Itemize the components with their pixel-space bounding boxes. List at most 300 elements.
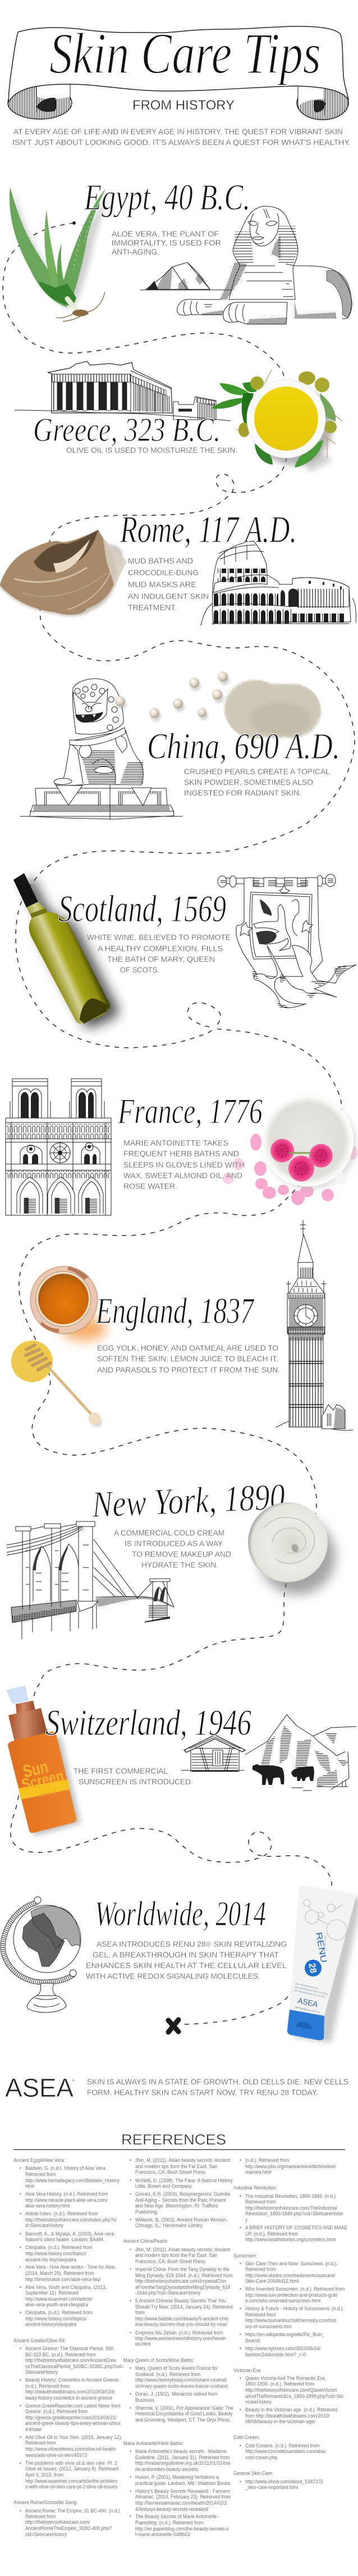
references: Ancient Egypt: http://www.history.com/topics/ <box>25 2251 87 2256</box>
photo: sunscreen bottle <box>6 1685 81 1836</box>
banner ribbon <box>8 26 348 102</box>
references: Ancient Rome: Retrieved from <box>25 2514 56 2519</box>
text: RENU 28: WITH ACTIVE REDOX SIGNALING MOLECULES. <box>86 1971 260 1980</box>
references: Marie Antoinette: practical guide. Lanham, Md.: Madison Books. <box>135 2480 231 2486</box>
text: cold cream: A COMMERCIAL COLD CREAM <box>114 1528 224 1537</box>
references: Ancient Egypt: September 11). Retrieved <box>25 2290 79 2296</box>
references: Ancient Egypt: • <box>20 2310 21 2315</box>
references: Victorian Era: from http://beautifulwithbrains.com/2010/ <box>245 2413 330 2419</box>
references: Ancient China: Francisco, CA: Bush Street Press. <box>135 2259 206 2264</box>
references: Ancient Greeks: Beauty History: Cosmetics in Ancient Greece. <box>25 2377 120 2383</box>
text: Marie Antoinette <box>123 1138 245 1191</box>
references: Marie Antoinette: f-marie-antoinette-548843/ <box>135 2532 191 2537</box>
references: Ancient Egypt: • <box>20 2231 21 2237</box>
references: Ancient Greeks: • <box>20 2403 21 2409</box>
references: Rome continued: • <box>130 2157 131 2163</box>
text: Marie Antoinette: MARIE ANTOINETTE TAKES <box>123 1138 228 1147</box>
call to action <box>5 2073 348 2102</box>
references: Sunscreen: Who Invented Sunscreen. (n.d.). Retrieved from <box>245 2286 345 2292</box>
references: Ancient Greeks: http://beautifulwithbrains.com/2010/03/03/b <box>25 2389 114 2395</box>
text: egg yolk: EGG YOLK, HONEY, AND OATMEAL ARE USED TO <box>97 1343 278 1352</box>
lion body <box>54 730 143 785</box>
tube brand: RENU <box>314 1932 328 1964</box>
references: Victorian Era: 08/06/beauty-in-the-victorian-age/ <box>245 2419 315 2424</box>
references: Rome continued: Jhin, M. (2011). Asian beauty secrets: Ancient <box>135 2157 230 2163</box>
references: Ancient Egypt: (2014, March 29). Retrieved from <box>25 2270 94 2276</box>
illustration: Parthenon <box>15 361 231 421</box>
references: Sunscreen: • <box>240 2332 241 2337</box>
photo: honey dipper <box>11 1341 102 1427</box>
rose petals <box>223 1134 357 1205</box>
tube brand: Gel Revitalizante De La Piel <box>294 1989 325 1998</box>
references: Mary Queen of Scots: Business. <box>135 2397 155 2403</box>
illustration: Brooklyn Bridge <box>7 1521 174 1639</box>
illustration: chalet <box>181 1735 245 1771</box>
references: Ancient Egypt: http://www.history.com/topics/ <box>25 2316 87 2321</box>
references: Ancient China: -1644.php?cid=SkincareHistory <box>135 2290 201 2296</box>
section: Greece <box>15 361 342 472</box>
illustration: globe <box>3 1897 81 2012</box>
banner rod <box>218 874 336 887</box>
text: white wine: OF SCOTS. <box>120 965 159 974</box>
references: Ancient Egypt: aloe-vera-history.html <box>25 2203 70 2209</box>
sunscreen label <box>17 1753 67 1802</box>
references: General Skin Care: http://www.ehow.com/about_5387375 <box>245 2479 323 2484</box>
text: RENU 28: ENHANCES SKIN HEALTH AT THE CELLULAR LEVEL <box>86 1961 287 1970</box>
photo: cold cream jar <box>248 1502 336 1594</box>
references: Victorian Era <box>233 2368 343 2424</box>
references: Ancient Egypt: http://www.herballegacy.com/Baldwin_History. <box>25 2178 121 2183</box>
references: Industrial Revolution: UP. (n.d.). Retrieved from <box>245 2231 298 2237</box>
text: white wine: A HEALTHY COMPLEXION, FILLS <box>98 944 223 953</box>
references: Ancient Egypt: aloe-vera-youth-and-cleopatra <box>25 2302 88 2307</box>
heading: Greece: Greece, 323 B.C. <box>33 411 221 448</box>
references: Ancient Greeks: http://www.examiner.com/article/the-problem <box>25 2478 117 2484</box>
references: Mary Queen of Scots: Mary Queen of Scots/Wine Baths: <box>123 2357 194 2363</box>
references: Ancient Egypt: Aloe Vera - How Aloe works - Time for Aloe. <box>25 2264 116 2270</box>
references: Ancient China: 5 Ancient Chinese Beauty Secrets That You <box>135 2298 226 2304</box>
references: Ancient China: • <box>130 2247 131 2252</box>
references: Ancient Greeks: Olive oil issues. (2012, January 8). Retrieved <box>25 2466 118 2471</box>
text: egg yolk: AND PARASOLS TO PROTECT IT FROM THE SUN. <box>97 1365 280 1374</box>
text: RENU 28: ASEA INTRODUCES RENU 28® SKIN REVITALIZING <box>97 1939 287 1948</box>
references: Ancient Greeks: d-know/ <box>25 2427 42 2432</box>
references: Industrial Revolution: A BRIEF HISTORY OF COSMETICS AND MAKE <box>245 2225 347 2230</box>
references: Ancient Egypt <box>13 2157 121 2327</box>
references: Sunscreen: ory-of-sunscreens.htm <box>245 2324 292 2329</box>
closing text: SKIN IS ALWAYS IN A STATE OF GROWTH. OLD CELLS DIE. NEW CELLS <box>87 2077 348 2086</box>
references: Marie Antoinette: Marie Antoinette's beauty secrets - Madame <box>135 2448 227 2454</box>
sunscreen label: SPF 6 <box>39 1789 58 1799</box>
references: Rome continued: Anti-Aging – Secrets from the Past, Present <box>135 2197 226 2203</box>
references: Ancient China: e6.html <box>135 2341 150 2347</box>
references: Ancient Greeks: • <box>20 2434 21 2440</box>
text: mud baths: TREATMENT. <box>128 603 177 612</box>
references: Sunscreen <box>233 2253 345 2357</box>
references: Rome continued: Little, Brown and Company. <box>135 2183 192 2189</box>
closing text <box>87 2077 348 2097</box>
references: Cold Cream: cold-cream.php <box>245 2455 278 2460</box>
text: crushed pearls: INGESTED FOR RADIANT SKIN. <box>184 788 301 797</box>
references: Rome continued: and modern tips from the Far East. San <box>135 2164 217 2169</box>
references: Victorian Era: http://thehistoryofskincare.com/QueenVictori <box>245 2387 337 2393</box>
intro text: ISN'T JUST ABOUT LOOKING GOOD. IT'S ALWAYS BEEN A QUEST FOR WHAT'S HEALTHY. <box>12 138 351 147</box>
section: China <box>20 671 340 819</box>
references: Marie Antoinette: Huson, P. (2001). Mastering herbalism a <box>135 2474 219 2480</box>
references: Ancient Egypt: Cleopatra. (n.d.). Retrieved from <box>25 2310 93 2315</box>
olive leaves <box>211 370 342 467</box>
photo: RENU 28 tube <box>287 1886 358 2043</box>
references: Sunscreen: fashion/24skinside.html?_r=0 <box>245 2352 306 2357</box>
continents <box>22 1906 80 1966</box>
references: Victorian Era: aAndTheRomanticEra_1850-1899.php?cid=Ski <box>245 2393 343 2399</box>
illustration: guardian lion <box>20 679 182 819</box>
references: Ancient Egypt: Retrieved from <box>25 2171 56 2177</box>
text: crushed pearls: CRUSHED PEARLS CREATE A TOPICAL <box>184 767 330 776</box>
references: Ancient China: and modern tips from the Far East. San <box>135 2252 217 2258</box>
references: Ancient China: ese-beauty-secrets-that-you-should-try-now/ <box>135 2321 227 2327</box>
dashed journey path <box>3 223 355 2024</box>
text: white wine: WHITE WINE, BELIEVED TO PROMOTE <box>87 933 231 942</box>
references: Ancient China: http://thehistoryofskincare.com/ImperialChin <box>135 2278 226 2284</box>
references: Sunscreen: Skin-Care-20546412.html <box>245 2278 299 2284</box>
illustration: Colosseum <box>201 541 356 625</box>
references: Ancient Rome: cid=SkincareHistory <box>25 2532 67 2537</box>
references: Ancient China: http://www.womeninworldhistory.com/heroin <box>135 2336 226 2341</box>
references: Ancient Egypt: Cleopatra. (n.d.). Retrieved from <box>25 2245 93 2250</box>
text: RENU 28: GEL, A BREAKTHROUGH IN SKIN THERAPY THAT <box>93 1950 279 1959</box>
text: mud baths: MUD BATHS AND <box>128 556 193 565</box>
references: Sunscreen: https://en.wikipedia.org/wiki/Piz_Buin_ <box>245 2332 325 2337</box>
intro text: AT EVERY AGE OF LIFE AND IN EVERY AGE IN HISTORY, THE QUEST FOR VIBRANT SKIN <box>13 127 343 136</box>
tube brand: Skin Revitalizing Gel <box>295 1982 318 1990</box>
references: Ancient Greeks: Retrieved from <box>25 2440 56 2446</box>
references: Industrial Revolution: Industrial Revolution: <box>233 2185 277 2191</box>
references: Marie Antoinette: History's Beauty Secrets Revealed! - Farmers' <box>135 2488 231 2494</box>
references: Ancient China: from <box>135 2310 145 2315</box>
references: Ancient Egypt: • <box>20 2245 21 2250</box>
references: Ancient China: Imperial China: From the Tang Dynasty to the <box>135 2266 230 2272</box>
references: Ancient Greeks: s-with-olive-oil-skin-care-pt-2-olive-oil-issues <box>25 2484 118 2489</box>
text: crushed pearls: SKIN POWDER, SOMETIMES ALSO <box>184 778 313 787</box>
references: Ancient Egypt: • <box>20 2191 21 2197</box>
references: Industrial Revolution: http://thehistoryofskincare.com/TheIndustrial <box>245 2205 337 2211</box>
references: Sunscreen: Skin Care-Then and Now: Sunscreen. (n.d.). <box>245 2261 338 2266</box>
section: Scotland <box>13 873 356 1028</box>
references: Ancient Rome: http://thehistoryofskincare.com/ <box>25 2519 90 2525</box>
references: Sunscreen: Retrieved from <box>245 2312 276 2318</box>
heading: Scotland: Scotland, 1569 <box>58 887 226 930</box>
text: mud baths <box>128 556 209 612</box>
references: Ancient China: http://www.babble.com/beauty/5-ancient-chin <box>135 2316 228 2321</box>
illustration: Notre-Dame <box>6 1079 111 1215</box>
text: cold cream: IS INTRODUCED AS A WAY <box>125 1539 223 1548</box>
text: white wine <box>87 933 231 974</box>
text: mud baths: AN INDULGENT SKIN <box>128 592 209 601</box>
references: Ancient Greeks: (n.d.). Retrieved from <box>25 2383 70 2389</box>
text: cold cream: TO REMOVE MAKEUP AND <box>132 1550 231 1559</box>
references: Ancient Rome: AncientRomeTheEmpire_31BC-400.php? <box>25 2525 112 2531</box>
ASEA logo: ASEA <box>5 2073 74 2102</box>
heading: England: England, 1837 <box>95 1291 255 1332</box>
references: Marie Antoinette continued: (n.d.). Retrieved from <box>245 2157 290 2163</box>
references: Mary Queen of Scots: Sherrow, V. (2001). For Appearance' Sake: The <box>135 2405 233 2411</box>
references: Sunscreen: http://www.nytimes.com/2010/06/24/ <box>245 2346 321 2351</box>
references: Ancient Greeks: • <box>20 2377 21 2383</box>
photo: honey jar <box>30 1266 107 1341</box>
references: Marie Antoinette: Marie Antoinette/Herb Baths: <box>123 2441 183 2446</box>
references: Ancient Egypt: http://www.examiner.com/article/ <box>25 2296 93 2302</box>
references: Ancient Greeks: news/add-olive-oil-skin/45973 <box>25 2452 87 2458</box>
references: Marie Antoinette: Guillotine. (2011, January 31). Retrieved from <box>135 2455 230 2460</box>
references: Rome continued: • <box>130 2217 131 2223</box>
references: Ancient Egypt: Aloe Vera History. (n.d.). Retrieved from <box>25 2191 108 2197</box>
references: Sunscreen: http://www.sun-protection-and-products-guid <box>245 2292 337 2298</box>
tube brand: 28 <box>307 1962 318 1974</box>
references: Rome continued: Williams, B. (2003). Ancient Roman Women. <box>135 2217 228 2223</box>
references: Victorian Era: Beauty in the Victorian age. (n.d.). Retrieved <box>245 2407 337 2413</box>
references: Ancient Egypt: http://thehistoryofskincare.com/index.php?ci <box>25 2217 116 2223</box>
tube brand: NET WT 90 ml / 3.0 fl. oz <box>295 2006 320 2014</box>
text: mud baths: MUD MASKS ARE <box>128 580 196 589</box>
references: Industrial Revolution <box>233 2185 347 2242</box>
portals <box>17 1177 103 1214</box>
text: egg yolk <box>97 1343 280 1374</box>
references: Sunscreen: • <box>240 2346 241 2351</box>
closing text: FORM. HEALTHY SKIN CAN START NOW. TRY RENU 28 TODAY. <box>87 2088 318 2097</box>
subtitle: FROM HISTORY <box>132 98 235 113</box>
references: Mary Queen of Scots: and Grooming. Westport, CT: The Oryx Press. <box>135 2417 231 2423</box>
references: Ancient China: Jhin, M. (2011). Asian beauty secrets: Ancient <box>135 2247 230 2252</box>
references: Ancient Greeks: • <box>20 2346 21 2351</box>
references: Ancient China <box>123 2238 233 2347</box>
text: egg yolk: SOFTEN THE SKIN; LEMON JUICE TO BLEACH IT, <box>97 1354 278 1363</box>
references column 1 <box>13 2157 124 2537</box>
sunscreen label: Sun <box>21 1757 50 1782</box>
text: mud baths: CROCODILE-DUNG <box>128 568 199 577</box>
references: Ancient Greeks: SkincareHistory <box>25 2369 58 2375</box>
references: Victorian Era: • <box>240 2375 241 2381</box>
references: Ancient Greeks: BC-323 BC. (n.d.). Retrieved from <box>25 2352 96 2357</box>
references column 2 <box>123 2157 233 2537</box>
section: Worldwide <box>3 1886 358 2043</box>
references: Sunscreen: e.com/who-invented-sunscreen.html <box>245 2298 320 2304</box>
references: Sunscreen: Sunscreen: <box>233 2253 257 2259</box>
references: Industrial Revolution: http://www.localhistories.org/cosmetics.html <box>245 2237 336 2242</box>
references: Ancient China: Ming Dynasty, 618-1644. (n.d.). Retrieved from <box>135 2273 232 2278</box>
references: Industrial Revolution: y <box>245 2217 248 2223</box>
references: Marie Antoinette: • <box>130 2488 131 2494</box>
references: Ancient Greeks: Ancient Greeks/Olive Oil: <box>13 2338 66 2343</box>
banner left curl <box>8 84 72 119</box>
heading: New York: New York, 1890 <box>91 1476 286 1525</box>
references: Ancient Egypt: Article Index. (n.d.). Retrieved from <box>25 2211 98 2216</box>
references: Sunscreen: • <box>240 2306 241 2311</box>
references: Sunscreen: History & Future - History of Sunscreens. (n.d.). <box>245 2306 344 2311</box>
section: Switzerland <box>6 1685 356 1836</box>
references: Rome continued: • <box>130 2178 131 2183</box>
references: Ancient Greeks: • <box>20 2460 21 2466</box>
tower windows <box>19 1089 96 1118</box>
references: Industrial Revolution: Retrieved from <box>245 2199 276 2205</box>
references: Marie Antoinette: http://madameguillotine.org.uk/2011/01/31/ma <box>135 2460 230 2466</box>
references: Victorian Era: Queen Victoria And The Romantic Era, <box>245 2375 326 2381</box>
banner tatters <box>253 946 356 1008</box>
illustration: heraldic banner <box>218 874 356 1008</box>
references: Ancient China: • <box>130 2266 131 2272</box>
heading: Worldwide: Worldwide, 2014 <box>95 1895 266 1933</box>
references: Rome continued: Chicago, IL.: Heinemann Library. <box>135 2223 203 2228</box>
references: Mary Queen of Scots: Scotland. (n.d.). Retrieved from <box>135 2371 200 2377</box>
references: Ancient Egypt: • <box>20 2211 21 2216</box>
references: Ancient Egypt: Aloe Vera, Youth and Cleopatra. (2013, <box>25 2284 107 2290</box>
illustration: mountains and cows <box>245 1715 356 1791</box>
references: Ancient China: aFromtheTangDynastytotheMingDynasty_618 <box>135 2284 230 2290</box>
references: Cold Cream: Cold Cream: <box>233 2434 260 2440</box>
references: Cold Cream <box>233 2434 326 2460</box>
references: Cold Cream: Cold Creams. (n.d.). Retrieved from <box>245 2443 319 2448</box>
references: Cold Cream: http://www.cosmeticsandskin.com/aba/ <box>245 2448 326 2454</box>
tube brand: ASEA <box>297 1996 319 2009</box>
text: Marie Antoinette: ROSE WATER. <box>123 1182 177 1191</box>
tube brand <box>294 1932 328 2014</box>
references: Rome continued: Publishing. <box>135 2209 158 2215</box>
references: Sunscreen: http://www.humantouchofchemistry.com/hist <box>245 2318 337 2323</box>
references: Ancient China: • <box>130 2330 131 2336</box>
references: Mary Queen of Scots: Mary, Queen of Scots leaves France for <box>135 2365 218 2371</box>
banner right curl <box>297 86 348 120</box>
references: Sunscreen: (brand) <box>245 2338 260 2343</box>
references: Industrial Revolution: • <box>240 2193 241 2199</box>
text: crushed pearls <box>184 767 330 797</box>
references: Victorian Era: 1850-1899. (n.d.). Retrieved from <box>245 2381 314 2387</box>
heading: Switzerland: Switzerland, 1946 <box>45 1702 251 1743</box>
references: Marie Antoinette continued: • <box>240 2157 241 2163</box>
references: Sunscreen: • <box>240 2286 241 2292</box>
references: Marie Antoinette: The Beauty Secrets of Marie Antoinette - <box>135 2514 219 2519</box>
text: sunscreen <box>74 1766 193 1786</box>
references: Marie Antoinette: • <box>130 2514 131 2519</box>
references: Marie Antoinette: • <box>130 2474 131 2480</box>
text: cold cream <box>114 1528 231 1569</box>
icon: X marks the spot <box>168 2020 178 2032</box>
heading: Egypt: Egypt, 40 B.C. <box>84 177 250 218</box>
heading: France: France, 1776 <box>117 1091 263 1131</box>
illustration: Big Ben <box>276 1220 353 1430</box>
lion collar <box>70 728 126 746</box>
title banner <box>8 21 348 120</box>
text: Marie Antoinette: WAX, SWEET ALMOND OIL, AND <box>123 1171 242 1180</box>
references: Victorian Era: ncareHistory <box>245 2399 272 2405</box>
text: olive oil: OLIVE OIL IS USED TO MOISTURIZE THE SKIN. <box>66 446 237 455</box>
references: Rome continued: and New Age. Bloomington, IN: Trafford <box>135 2203 218 2209</box>
references heading: REFERENCES <box>121 2131 226 2148</box>
references: Ancient Egypt: Barcroft, A., & Myskja, A. (2003). Aloe vera: <box>25 2231 115 2237</box>
references: General Skin Care: General Skin Care: <box>233 2470 273 2476</box>
references: Ancient Rome <box>13 2500 121 2537</box>
references: General Skin Care: • <box>240 2479 241 2484</box>
text: RENU 28 <box>86 1939 287 1980</box>
text: white wine: THE BATH OF MARY, QUEEN <box>107 955 215 964</box>
references: Ancient China: • <box>130 2298 131 2304</box>
references: Ancient Greeks: Ancient Greece: The Classical Period, 500 <box>25 2346 113 2351</box>
references: Ancient China: Should Try Now. (2014, January 24). Retrieved <box>135 2304 233 2310</box>
references: Ancient Greeks: http://www.oliveoiltimes.com/olive-oil-health- <box>25 2446 117 2452</box>
heading: Rome: Rome, 117 A.D. <box>120 508 297 551</box>
cow 1 <box>253 1764 284 1785</box>
ASEA logo: ® <box>72 2079 75 2083</box>
references: Ancient Greeks: Greece. (n.d.). Retrieved from <box>25 2409 88 2414</box>
references: Marie Antoinette continued: http://www.pbs.org/marieantoinette/timeline/ <box>245 2164 336 2169</box>
references: Ancient China: Empress Wu Zetian. (n.d.). Retrieved from <box>135 2330 223 2336</box>
tube brand: Gel Revitalisant Pour La Peau <box>295 1986 328 1996</box>
illustration: sphinx <box>177 206 352 324</box>
references: Mary Queen of Scots <box>123 2357 233 2423</box>
references: Rome continued: • <box>130 2191 131 2197</box>
text: aloe vera: ALOE VERA, THE PLANT OF <box>112 229 219 238</box>
illustration: pyramids <box>140 262 247 290</box>
references: Marie Antoinette: • <box>130 2448 131 2454</box>
references: Ancient Egypt: ancient-his ory/cleopatra <box>25 2257 76 2262</box>
olives <box>238 371 337 437</box>
intro text <box>12 127 351 147</box>
references: Ancient Rome: Ancient Rome/Crocodile Dung: <box>13 2500 78 2505</box>
photo: white wine bottle <box>13 873 119 1028</box>
references: Ancient Greeks: Add Olive Oil to Your Skin. (2015, January 12). <box>25 2434 122 2440</box>
photo: mud mask <box>0 530 127 616</box>
references: Mary Queen of Scots: • <box>130 2405 131 2411</box>
references: Ancient Greeks: The problems with olive oil & skin care: Pt. 2: <box>25 2460 118 2466</box>
references: Ancient Greeks: http://thehistoryofskincare.com/AncientGree <box>25 2357 116 2363</box>
references: Marie Antoinette continued: married.html <box>245 2169 271 2175</box>
references: Ancient Egypt: • <box>20 2264 21 2270</box>
section: England <box>11 1220 353 1430</box>
section: France <box>6 1079 357 1215</box>
references: Mary Queen of Scots: Doran, J. (1902). Monarchs retired from <box>135 2391 218 2397</box>
text: Marie Antoinette: SLEEPS IN GLOVES LINED WITH <box>123 1160 245 1169</box>
references: Industrial Revolution: • <box>240 2225 241 2230</box>
text: Marie Antoinette: FREQUENT HERB BATHS AND <box>123 1149 239 1158</box>
references: Marie Antoinette: http://en.paperblog.com/the-beauty-secrets-o <box>135 2526 229 2532</box>
references: Rome continued: Gomez, K.R. (2004). Biosynergenics: Guerilla <box>135 2191 230 2197</box>
references: Ancient Egypt: http://www.miracle-plant-aloe-vera.com/ <box>25 2197 108 2203</box>
lion head <box>72 679 123 734</box>
references: Ancient Rome: • <box>20 2508 21 2514</box>
text: aloe vera: IMMORTALITY, IS USED FOR <box>112 238 221 247</box>
references: Sunscreen: http://www.skininc.com/treatments/suncare/ <box>245 2273 336 2278</box>
references: Cold Cream: • <box>240 2443 241 2448</box>
text: aloe vera <box>112 229 221 256</box>
rose windows <box>20 1143 100 1164</box>
references: Ancient Greeks: ceTheClassicalPeriod_500BC-323BC.php?cid= <box>25 2364 124 2369</box>
references: Ancient Egypt: • <box>20 2284 21 2290</box>
references: Victorian Era: Victorian Era: <box>233 2368 261 2373</box>
references column 3 <box>233 2157 347 2490</box>
references: Ancient Egypt: ancient-history/cleopatra <box>25 2321 76 2327</box>
section: Rome <box>0 508 356 625</box>
references: Ancient China: Ancient China/Pearls: <box>123 2238 168 2244</box>
roses <box>270 1139 333 1182</box>
references: Ancient Greeks: April 9, 2015, from <box>25 2472 63 2478</box>
references: Ancient Greeks: http://greece.greekreporter.com/2014/04/21/ <box>25 2415 117 2420</box>
sunscreen label: Screen <box>20 1767 66 1793</box>
references: Mary Queen of Scots: sh/mary-queen-scots-leaves-france-scotland <box>135 2383 228 2389</box>
references: Ancient Egypt: html <box>25 2183 34 2189</box>
text: cold cream: HYDRATE THE SKIN. <box>141 1560 218 1569</box>
references: Mary Queen of Scots: Historical Encyclopedia of Good Looks, Beauty <box>135 2411 233 2416</box>
references: Marie Antoinette: Almanac. (2014, February 23). Retrieved from <box>135 2494 231 2500</box>
references: Marie Antoinette: rie-antoinettes-beauty-secrets/ <box>135 2466 199 2472</box>
